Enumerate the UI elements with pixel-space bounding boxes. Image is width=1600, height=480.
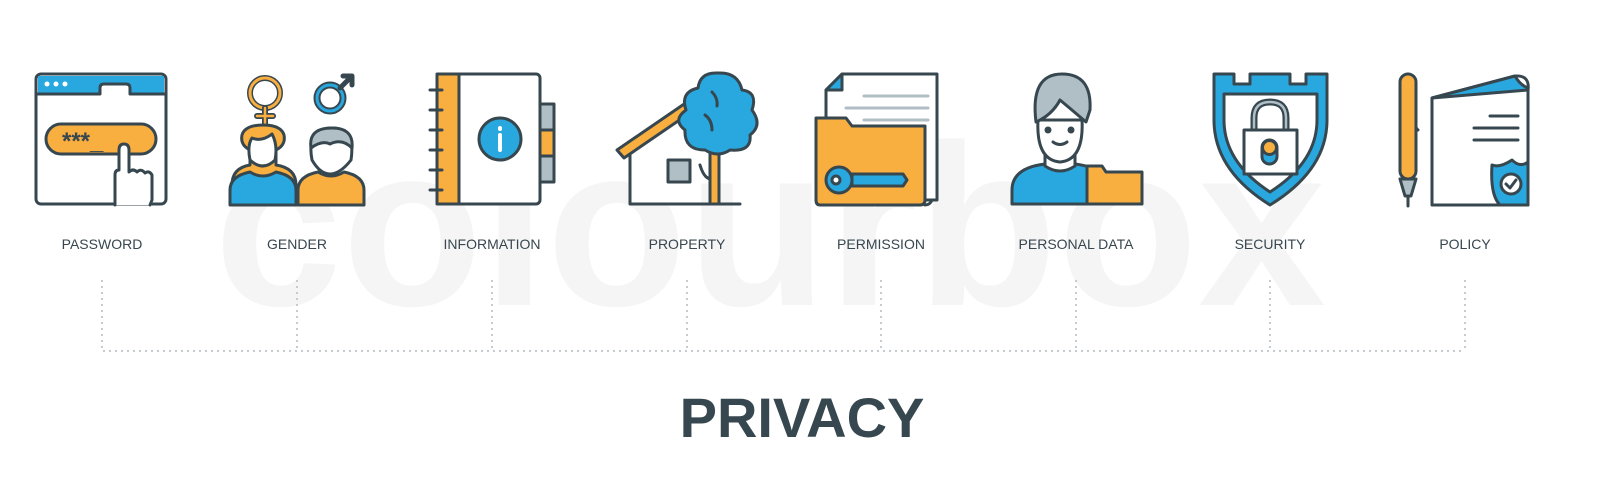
labels: PERSONAL DATA [1019,236,1134,252]
icon: gender [230,76,364,205]
icon: security [1214,74,1327,205]
icon: permission [816,74,937,205]
title: PRIVACY [680,386,924,449]
labels: PROPERTY [649,236,726,252]
labels: SECURITY [1235,236,1306,252]
labels [62,236,1491,252]
labels: POLICY [1439,236,1491,252]
labels: INFORMATION [444,236,540,252]
icon: password: ***_ [62,128,104,155]
text: colourbox [214,97,1326,354]
labels: PERMISSION [837,236,925,252]
icon: policy [1400,74,1528,206]
labels: GENDER [267,236,327,252]
icon: personal data [1012,74,1142,204]
labels: PASSWORD [62,236,142,252]
icon: password [36,74,166,205]
icon: information [430,74,554,204]
icon: property [617,73,757,204]
